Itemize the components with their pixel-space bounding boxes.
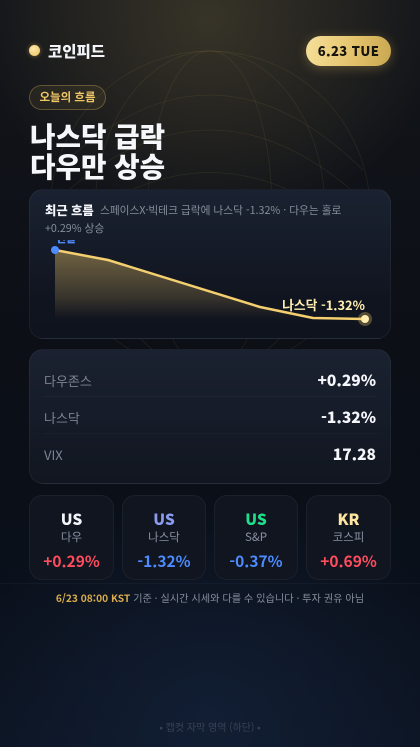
vix row (44, 443, 376, 465)
card: kospi (306, 495, 391, 580)
logo dot (29, 45, 40, 56)
tag: 오늘의 흐름 (39, 89, 96, 105)
dow label: 다우존스 (44, 371, 92, 390)
recent flow description: 스페이스X·빅테크 급락에 나스닥 -1.32% · 다우는 홀로 +0.29% 상승 (45, 203, 341, 236)
card: kospi: KR (338, 508, 359, 530)
start point (51, 246, 59, 254)
card: dow: US (61, 508, 82, 530)
card: s&p: US (245, 508, 267, 530)
background glow (0, 0, 420, 340)
dow row (44, 367, 376, 397)
card: nasdaq: 나스닥 (148, 529, 180, 545)
title (30, 115, 165, 185)
card: nasdaq: -1.32% (137, 550, 191, 572)
vix label: VIX (44, 445, 63, 464)
title: 나스닥 급락 (30, 115, 165, 155)
card: s&p: -0.37% (229, 550, 283, 572)
chart line (55, 250, 365, 319)
card: s&p (214, 495, 298, 580)
card: nasdaq (122, 495, 206, 580)
end point (358, 312, 372, 326)
date badge: 6.23 TUE (318, 41, 379, 60)
globe wireframe (51, 50, 369, 349)
logo (26, 40, 105, 62)
footnote: 6/23 08:00 KST 기준 · 실시간 시세와 다를 수 있습니다 · 투자 권유 아님 (56, 590, 364, 605)
bottom navy glow (0, 480, 420, 747)
logo name: 코인피드 (48, 40, 105, 62)
date badge (306, 36, 391, 66)
panel: index list (29, 349, 391, 484)
card: nasdaq: US (153, 508, 175, 530)
card: kospi: +0.69% (320, 550, 377, 572)
caption area placeholder: • 캡컷 자막 영역 (하단) • (159, 719, 261, 734)
card: dow: +0.29% (43, 550, 100, 572)
end label: 나스닥 -1.32% (282, 295, 365, 314)
dow value: +0.29% (317, 369, 376, 391)
card: kospi: 코스피 (333, 529, 364, 545)
card: dow (29, 495, 114, 580)
line chart (51, 240, 372, 326)
nasdaq label: 나스닥 (44, 408, 80, 427)
chart area fill (55, 250, 365, 319)
panel: recent flow (29, 189, 391, 339)
nasdaq value: -1.32% (321, 406, 376, 428)
vix value: 17.28 (333, 443, 376, 465)
nasdaq row (44, 404, 376, 434)
tag (29, 85, 106, 110)
title: 다우만 상승 (30, 145, 165, 185)
footnote (0, 583, 420, 611)
card: s&p: S&P (245, 529, 267, 545)
card: dow: 다우 (61, 529, 82, 545)
recent flow heading: 최근 흐름 (45, 201, 94, 219)
